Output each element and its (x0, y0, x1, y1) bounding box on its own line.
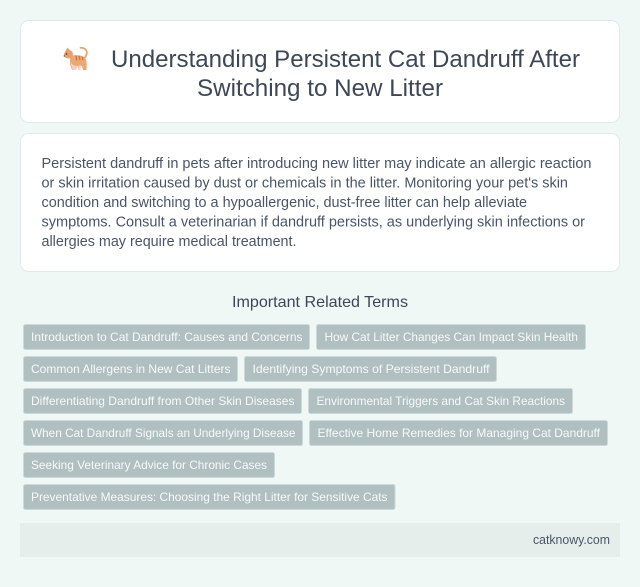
tag: Common Allergens in New Cat Litters (31, 362, 230, 376)
tag: Introduction to Cat Dandruff: Causes and Concerns (31, 330, 302, 344)
panel: summary card (20, 134, 620, 272)
heading: related terms: Important Related Terms (232, 294, 408, 311)
tag (24, 484, 395, 510)
summary paragraph: Persistent dandruff in pets after introducing new litter may indicate an allergic reaction (42, 156, 592, 172)
tag (308, 388, 572, 414)
title text: Understanding Persistent Cat Dandruff After (111, 46, 580, 73)
tag: Seeking Veterinary Advice for Chronic Cases (31, 458, 267, 472)
tag: Identifying Symptoms of Persistent Dandruff (252, 362, 490, 376)
summary paragraph: or skin irritation caused by dust or chemicals in the litter. Monitoring your pet's skin (42, 176, 568, 192)
tag (24, 420, 302, 446)
tag: When Cat Dandruff Signals an Underlying Disease (31, 426, 296, 440)
tag: Preventative Measures: Choosing the Right Litter for Sensitive Cats (31, 490, 388, 504)
tag (244, 356, 496, 382)
tag (24, 452, 274, 478)
tag (24, 356, 238, 382)
tag: Effective Home Remedies for Managing Cat Dandruff (318, 426, 601, 440)
summary paragraph: allergies may require medical treatment. (42, 234, 296, 250)
tag (24, 324, 310, 350)
tag list: related terms (24, 324, 608, 510)
summary paragraph (42, 156, 592, 250)
tag (316, 324, 586, 350)
summary paragraph: symptoms. Consult a veterinarian if dandruff persists, as underlying skin infections or (42, 214, 585, 230)
icon: cat (64, 48, 87, 70)
tag (24, 388, 302, 414)
footer site name: catknowy.com (533, 532, 610, 547)
tag: Environmental Triggers and Cat Skin Reactions (316, 394, 565, 408)
panel: title card (20, 20, 620, 122)
footer bar (20, 523, 620, 557)
title text (111, 46, 580, 102)
tag (310, 420, 608, 446)
title text: Switching to New Litter (197, 75, 443, 102)
summary paragraph: condition and switching to a hypoallergenic, dust-free litter can help alleviate (42, 195, 527, 211)
tag: How Cat Litter Changes Can Impact Skin Health (324, 330, 578, 344)
tag: Differentiating Dandruff from Other Skin Diseases (31, 394, 294, 408)
